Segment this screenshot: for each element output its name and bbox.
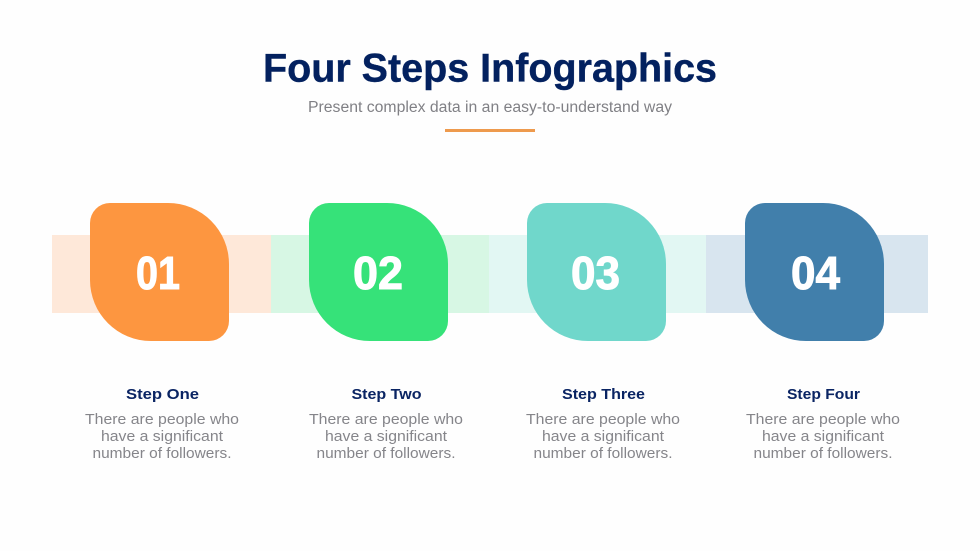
badge: 04: 04 (791, 247, 840, 299)
text: step two description (309, 412, 463, 462)
subtitle: Present complex data in an easy-to-understand way (308, 99, 672, 116)
badge: 01 (90, 203, 229, 341)
panel: step four (706, 203, 928, 462)
text: step three description: number of followers. (534, 446, 672, 462)
badge: 04 (745, 203, 884, 341)
text: step two description: There are people who (309, 412, 463, 428)
text: step two description: have a significant (325, 429, 447, 445)
band: step three (489, 235, 706, 313)
text: step one description: There are people who (85, 412, 239, 428)
text: step four description: There are people who (746, 412, 900, 428)
text: step one description: have a significant (101, 429, 223, 445)
badge: 03 (527, 203, 666, 341)
title accent line (445, 129, 535, 132)
text: step three description: have a significant (542, 429, 664, 445)
badge: 02 (309, 203, 448, 341)
badge: 02: 02 (353, 247, 403, 299)
heading: step four: Step Four (787, 386, 860, 403)
band: step two (271, 235, 489, 313)
title: Four Steps Infographics (263, 46, 717, 90)
text: step one description: number of followers. (92, 446, 232, 462)
text: step two description: number of followers. (316, 446, 456, 462)
text: step one description (85, 412, 239, 462)
text: step three description (526, 412, 680, 462)
text: step four description (746, 412, 900, 462)
badge: 01: 01 (136, 247, 180, 299)
band: step four (706, 235, 928, 313)
panel: step three (489, 203, 706, 462)
text: step three description: There are people who (526, 412, 680, 428)
panel: step two (271, 203, 489, 462)
badge: 03: 03 (571, 247, 620, 299)
heading: step three: Step Three (562, 386, 645, 403)
text: step four description: have a significant (762, 429, 884, 445)
text: step four description: number of followers. (754, 446, 892, 462)
heading: step one: Step One (126, 386, 199, 403)
panel: step one (52, 203, 271, 462)
heading: step two: Step Two (352, 386, 422, 403)
band: step one (52, 235, 271, 313)
